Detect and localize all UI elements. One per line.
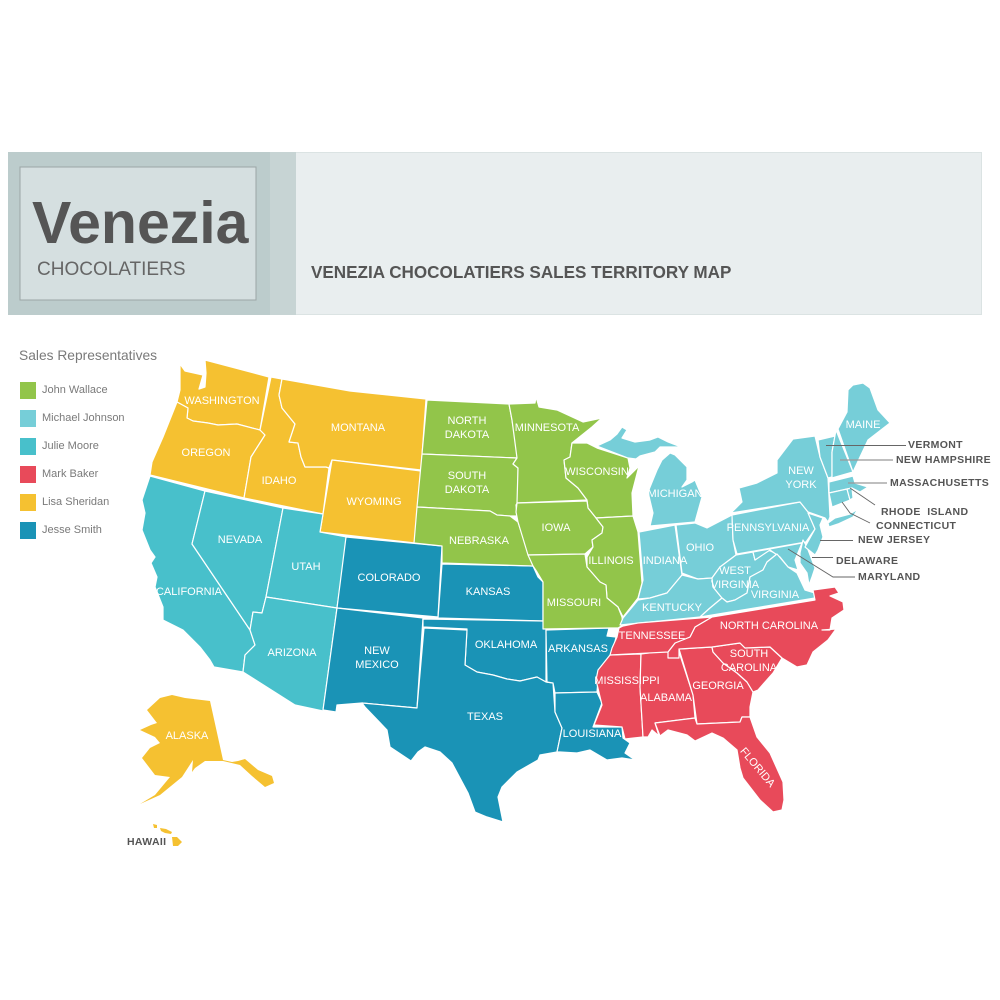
state labels: NEW: [364, 645, 390, 657]
legend: John Wallace: [42, 384, 108, 396]
state labels: MEXICO: [355, 659, 399, 671]
state labels: CAROLINA: [721, 662, 778, 674]
state labels: DAKOTA: [445, 429, 490, 441]
state labels: INDIANA: [643, 555, 688, 567]
state labels: IDAHO: [262, 475, 297, 487]
state labels: NEW: [788, 465, 814, 477]
state labels: WISCONSIN: [565, 466, 629, 478]
territory: Mark Baker: [594, 587, 844, 812]
state labels: WEST: [719, 565, 751, 577]
legend: [19, 348, 157, 539]
state labels: TENNESSEE: [619, 630, 685, 642]
state labels: OREGON: [182, 447, 230, 459]
northeast callout labels: HAWAII: [127, 836, 166, 848]
legend: Lisa Sheridan: [42, 496, 109, 508]
header banner: [8, 152, 982, 315]
logo box: [20, 167, 256, 300]
state labels: MISSISSIPPI: [594, 675, 660, 687]
state labels: COLORADO: [358, 572, 421, 584]
northeast callout labels: NEW HAMPSHIRE: [896, 454, 991, 466]
northeast callout labels: NEW JERSEY: [858, 534, 930, 546]
legend: Michael Johnson: [42, 412, 125, 424]
northeast callout labels: RHODE ISLAND: [881, 506, 968, 518]
state labels: DAKOTA: [445, 484, 490, 496]
state labels: MICHIGAN: [648, 488, 703, 500]
state labels: KENTUCKY: [642, 602, 703, 614]
state labels: [156, 395, 880, 790]
legend: Jesse Smith: [42, 524, 102, 536]
title: VENEZIA CHOCOLATIERS SALES TERRITORY MAP: [311, 263, 731, 282]
state labels: SOUTH: [448, 470, 486, 482]
state labels: VIRGINIA: [751, 589, 800, 601]
legend: Sales Representatives: [19, 348, 157, 363]
leader lines: [788, 446, 906, 577]
state labels: TEXAS: [467, 711, 503, 723]
state labels: MISSOURI: [547, 597, 601, 609]
state labels: WYOMING: [346, 496, 402, 508]
northeast callout labels: MARYLAND: [858, 571, 921, 583]
state labels: PENNSYLVANIA: [727, 522, 810, 534]
northeast callout labels: DELAWARE: [836, 555, 898, 567]
northeast callout labels: CONNECTICUT: [876, 520, 956, 532]
state labels: ILLINOIS: [588, 555, 634, 567]
logo box: Venezia: [32, 190, 250, 256]
state labels: ALABAMA: [640, 692, 693, 704]
state labels: ARIZONA: [268, 647, 317, 659]
state labels: NEBRASKA: [449, 535, 510, 547]
logo box: CHOCOLATIERS: [37, 259, 186, 280]
state labels: NORTH: [448, 415, 487, 427]
state labels: ARKANSAS: [548, 643, 608, 655]
legend: Julie Moore: [42, 440, 99, 452]
state labels: MINNESOTA: [515, 422, 580, 434]
state labels: OKLAHOMA: [475, 639, 538, 651]
state labels: MAINE: [846, 419, 880, 431]
state labels: FLORIDA: [737, 746, 778, 790]
state labels: YORK: [785, 479, 817, 491]
state labels: GEORGIA: [692, 680, 744, 692]
state labels: VIRGINIA: [711, 579, 760, 591]
state labels: ALASKA: [166, 730, 209, 742]
state labels: IOWA: [542, 522, 571, 534]
state labels: MONTANA: [331, 422, 386, 434]
state labels: OHIO: [686, 542, 714, 554]
territory: Jesse Smith: [323, 537, 635, 822]
territory: Michael Johnson: [597, 383, 890, 625]
state labels: KANSAS: [466, 586, 510, 598]
state labels: LOUISIANA: [563, 728, 622, 740]
state labels: SOUTH: [730, 648, 768, 660]
territory: Lisa Sheridan: [140, 360, 426, 846]
state labels: NORTH CAROLINA: [720, 620, 819, 632]
state labels: UTAH: [291, 561, 321, 573]
legend: Mark Baker: [42, 468, 99, 480]
territory: John Wallace: [414, 397, 642, 629]
northeast callout labels: [127, 439, 991, 848]
state labels: CALIFORNIA: [156, 586, 223, 598]
territory: Julie Moore: [142, 476, 347, 711]
northeast callout labels: VERMONT: [908, 439, 963, 451]
state labels: WASHINGTON: [184, 395, 260, 407]
state labels: NEVADA: [218, 534, 263, 546]
northeast callout labels: MASSACHUSETTS: [890, 477, 989, 489]
